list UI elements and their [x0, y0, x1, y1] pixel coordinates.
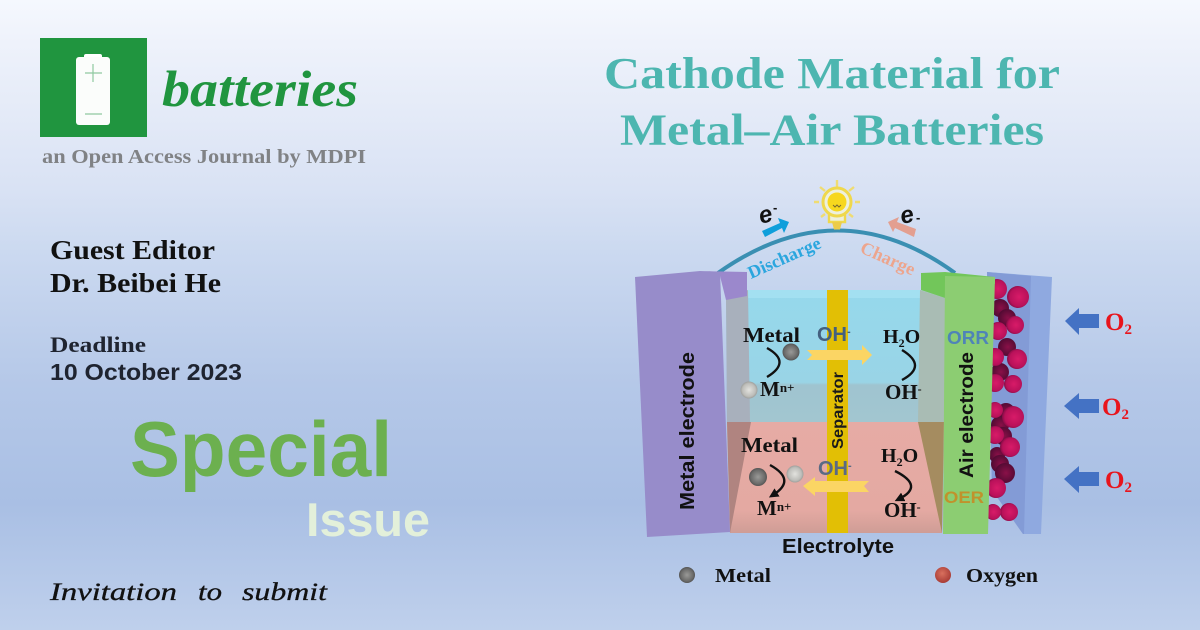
- reaction curve: [902, 350, 915, 380]
- water label: H: [881, 445, 897, 467]
- metal ion label: n+: [777, 499, 791, 514]
- hydroxide label: -: [847, 326, 851, 338]
- oxygen arrow 2: O: [1102, 394, 1121, 421]
- circuit wire: [718, 230, 955, 273]
- right chamber wall lower: [918, 422, 944, 533]
- oxygen spheres: [985, 279, 1029, 521]
- hydroxide product: OH: [885, 380, 918, 404]
- metal label: Metal: [741, 433, 798, 457]
- reaction curve: [767, 348, 780, 377]
- metal electrode label: Metal electrode: [677, 352, 699, 510]
- deadline: [50, 332, 242, 385]
- legend: metal: [679, 565, 771, 587]
- special issue heading: Special: [130, 405, 392, 493]
- metal ion sphere: [786, 466, 804, 482]
- electrolyte chamber: [726, 290, 945, 533]
- legend: oxygen: Oxygen: [966, 565, 1038, 587]
- hydroxide label: OH: [817, 324, 847, 346]
- hydroxide product: OH: [884, 498, 917, 522]
- metal sphere: [749, 468, 767, 486]
- metal ion label: M: [757, 496, 777, 520]
- water label: O: [905, 326, 920, 348]
- special issue heading: [130, 405, 430, 546]
- air electrode: [921, 272, 995, 534]
- water label: H: [883, 326, 899, 348]
- title: Metal–Air Batteries: [620, 106, 1044, 154]
- right chamber wall: [918, 290, 945, 422]
- legend: metal: Metal: [715, 565, 771, 587]
- invitation to submit: to: [198, 579, 222, 606]
- top rim: [748, 290, 920, 298]
- oxygen arrow 2: 2: [1121, 407, 1129, 423]
- discharge reactions: [740, 323, 922, 404]
- oxygen arrow 1: O: [1105, 309, 1124, 336]
- invitation to submit: [49, 579, 328, 606]
- electron charge label and arrow: e: [898, 201, 916, 230]
- metal ion label: n+: [780, 380, 794, 395]
- hydroxide label: -: [848, 460, 852, 472]
- guest editor: Guest Editor: [50, 235, 215, 265]
- invitation to submit: Invitation: [49, 579, 177, 606]
- separator label: Separator: [830, 372, 847, 449]
- water label: 2: [897, 455, 903, 469]
- ORR label: ORR: [947, 328, 989, 348]
- guest editor: [50, 235, 221, 298]
- electrolyte label: Electrolyte: [782, 536, 894, 558]
- metal ion label: M: [760, 377, 780, 401]
- oxygen arrow 1: 2: [1124, 322, 1132, 338]
- special issue heading: Issue: [306, 493, 430, 546]
- oxygen arrow 1: [1065, 308, 1132, 338]
- electron discharge label and arrow: e: [756, 200, 775, 230]
- hydroxide product: -: [918, 382, 922, 396]
- icon: battery: [76, 54, 110, 125]
- journal logo: [40, 38, 366, 168]
- electron charge label and arrow: -: [916, 210, 920, 225]
- oxygen arrow 2: [1064, 393, 1129, 423]
- legend: oxygen: [935, 565, 1038, 587]
- air electrode label: Air electrode: [957, 352, 978, 478]
- water label: 2: [899, 336, 905, 350]
- journal tagline: an Open Access Journal by MDPI: [42, 146, 366, 168]
- logo green square: [40, 38, 147, 137]
- oxygen arrow 3: 2: [1124, 480, 1132, 496]
- water label: O: [903, 445, 918, 467]
- hydroxide label: OH: [818, 458, 848, 480]
- lower pink electrolyte: [727, 422, 944, 533]
- guest editor: Dr. Beibei He: [50, 268, 221, 298]
- upper blue electrolyte: [726, 290, 945, 422]
- left chamber wall: [726, 290, 750, 422]
- electron charge label and arrow: [888, 201, 920, 237]
- metal sphere: [782, 344, 800, 360]
- metal electrode: [635, 271, 747, 537]
- reaction curve: [895, 471, 911, 499]
- charge reactions: [741, 433, 921, 522]
- OER label: OER: [944, 488, 984, 507]
- separator: [827, 290, 848, 533]
- electron discharge label and arrow: [756, 200, 789, 237]
- icon: light bulb: [814, 180, 860, 230]
- oxygen arrow 3: [1064, 466, 1132, 496]
- yellow arrow left: [803, 477, 869, 496]
- journal name: batteries: [162, 62, 358, 118]
- metal label: Metal: [743, 323, 800, 347]
- left chamber wall lower: [727, 422, 751, 533]
- right oxygen panel: [987, 272, 1052, 534]
- invitation to submit: submit: [242, 579, 328, 606]
- title: Cathode Material for: [604, 49, 1060, 98]
- title: [604, 49, 1060, 154]
- metal ion sphere: [740, 382, 758, 398]
- reaction curve: [770, 465, 784, 495]
- electron discharge label and arrow: -: [773, 200, 777, 215]
- charge label: Charge: [857, 237, 918, 279]
- deadline: Deadline: [50, 332, 146, 357]
- hydroxide product: -: [917, 500, 921, 514]
- deadline: 10 October 2023: [50, 359, 242, 385]
- oxygen arrow 3: O: [1105, 467, 1124, 494]
- yellow arrow right: [807, 345, 872, 365]
- battery diagram: [635, 180, 1132, 587]
- discharge label: Discharge: [744, 233, 824, 283]
